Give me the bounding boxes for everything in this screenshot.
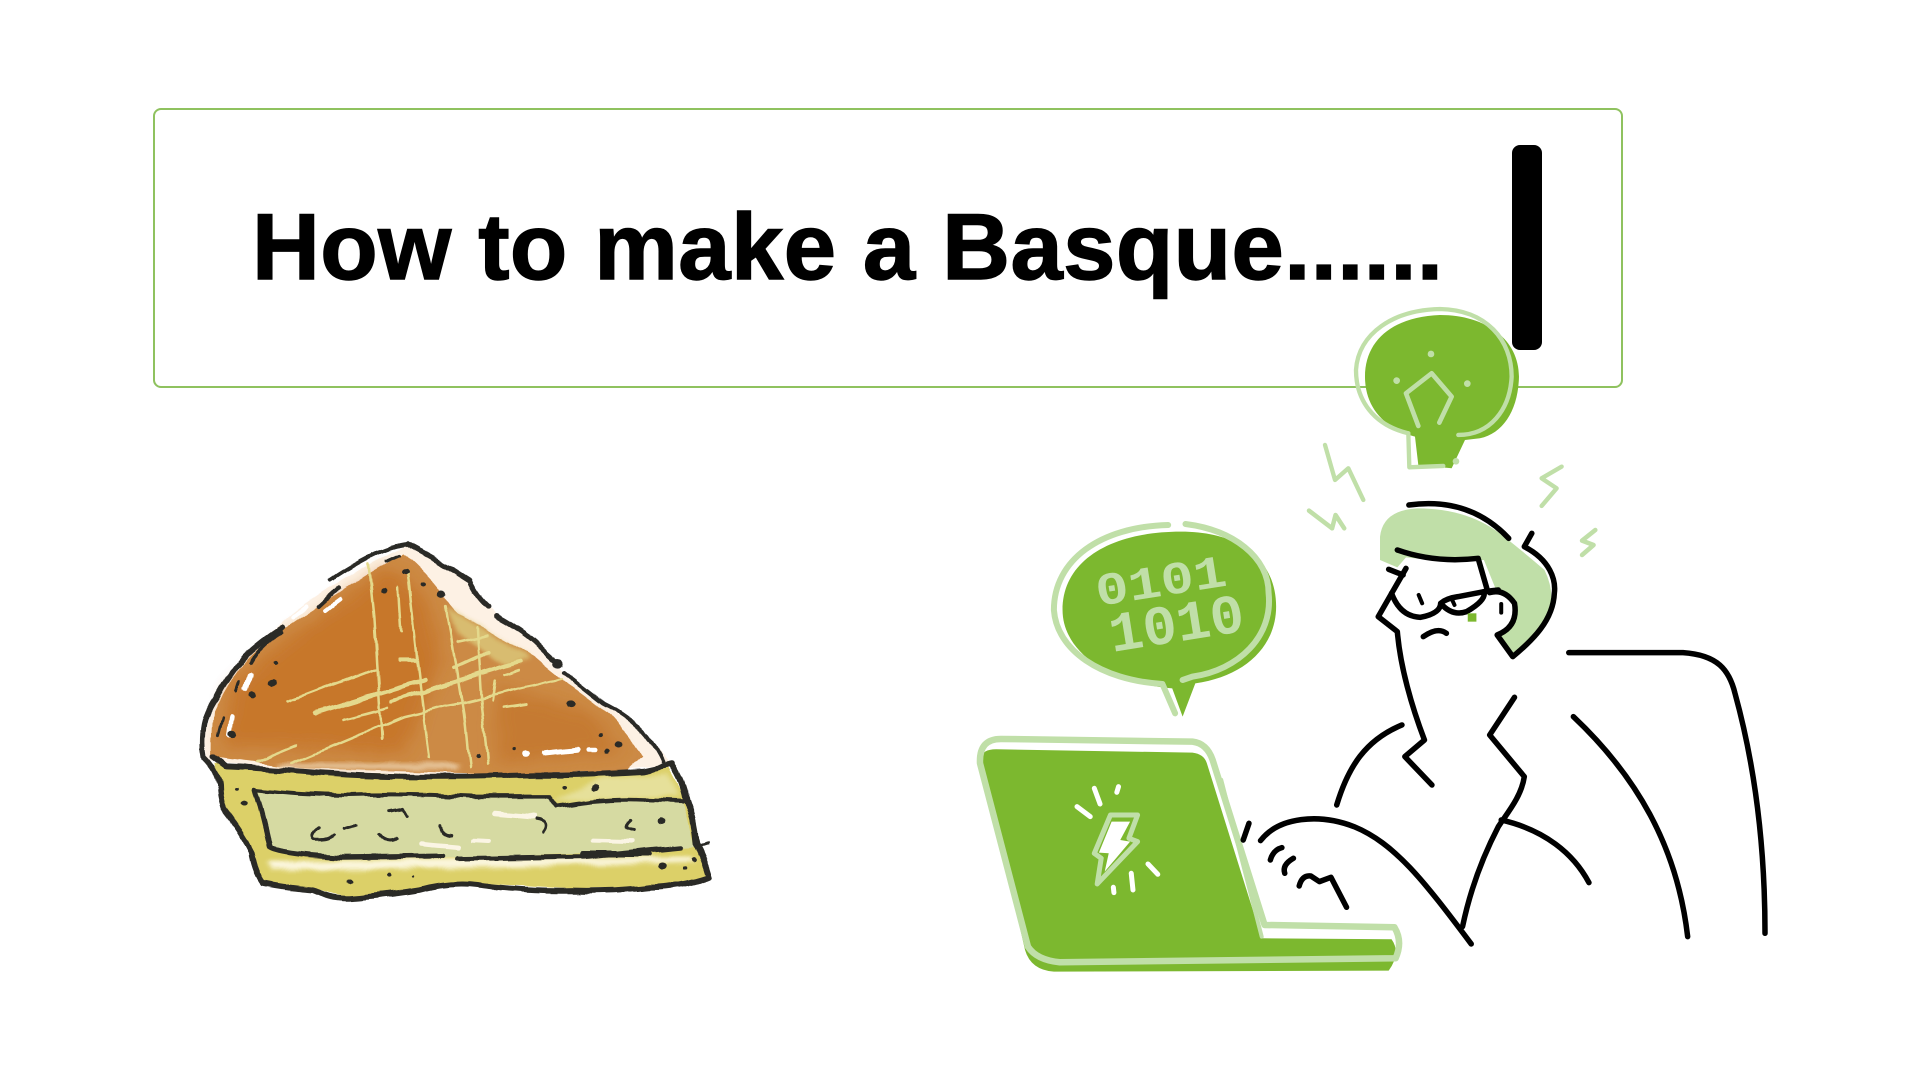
binary digits: 1010 bbox=[1105, 584, 1249, 669]
typing cursor bar bbox=[1512, 145, 1542, 350]
illustration: person at laptop bbox=[980, 504, 1765, 972]
sparks around bulb bbox=[1325, 445, 1562, 506]
icon: light bulb bbox=[1325, 309, 1562, 506]
cheek mark bbox=[1468, 613, 1476, 622]
icon: basque cake slice bbox=[203, 544, 710, 898]
glasses bbox=[1392, 592, 1484, 617]
speech bubble bbox=[1054, 524, 1276, 717]
mouth bbox=[1423, 631, 1446, 637]
crust score marks bbox=[256, 563, 562, 767]
cake speckles bbox=[229, 570, 697, 883]
bulb fill bbox=[1365, 315, 1519, 468]
person lines bbox=[1243, 504, 1765, 944]
cake filling bbox=[255, 792, 694, 858]
binary digits bbox=[1092, 548, 1249, 669]
bulb outline bbox=[1356, 309, 1512, 467]
cake outlines bbox=[203, 544, 710, 898]
cake side crust bbox=[215, 763, 710, 897]
title text: How to make a Basque...... bbox=[252, 194, 1443, 299]
binary digits: 0101 bbox=[1092, 548, 1231, 620]
laptop bbox=[980, 739, 1399, 972]
lightning icon bbox=[1077, 787, 1158, 893]
cake top crust bbox=[204, 545, 671, 777]
title box bbox=[154, 109, 1622, 387]
crust highlights bbox=[230, 599, 594, 753]
sparks bbox=[1309, 511, 1595, 555]
hair bbox=[1380, 508, 1551, 657]
